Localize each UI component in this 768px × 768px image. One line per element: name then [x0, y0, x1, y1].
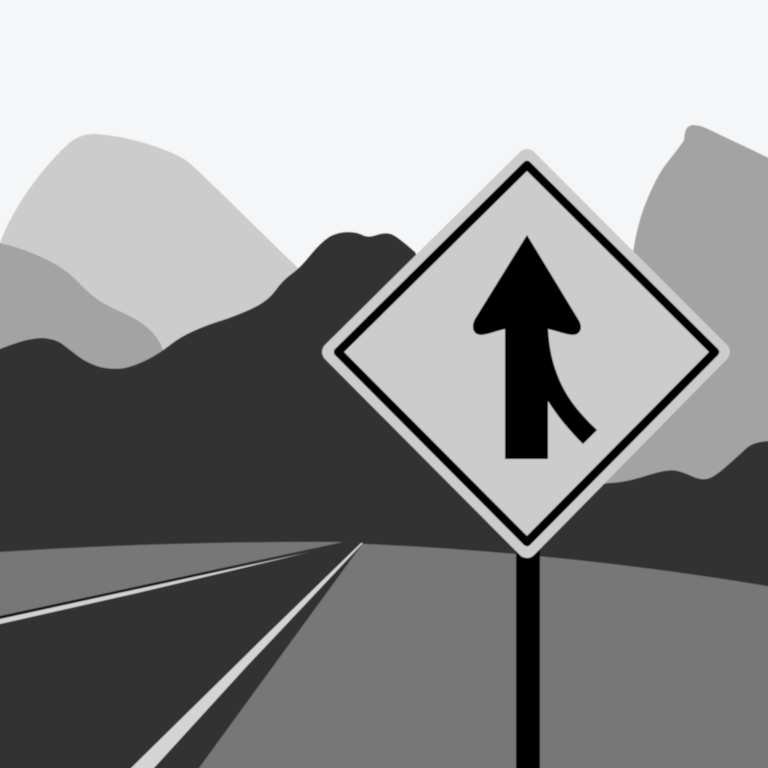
merge arrow icon — [473, 235, 597, 459]
sign outer plate — [332, 159, 720, 548]
left mid grey mountain — [0, 242, 163, 400]
dark mountain range — [0, 232, 768, 600]
dark line beside left edge line — [0, 556, 280, 620]
merge sign — [332, 159, 720, 548]
road shoulder ground — [0, 542, 768, 768]
sign black border — [338, 165, 715, 542]
asphalt road — [0, 542, 363, 768]
sign post — [516, 540, 540, 768]
right grey mountain — [590, 125, 768, 520]
far light mountain — [0, 134, 298, 400]
left edge line — [0, 552, 310, 625]
right edge line — [127, 543, 363, 768]
